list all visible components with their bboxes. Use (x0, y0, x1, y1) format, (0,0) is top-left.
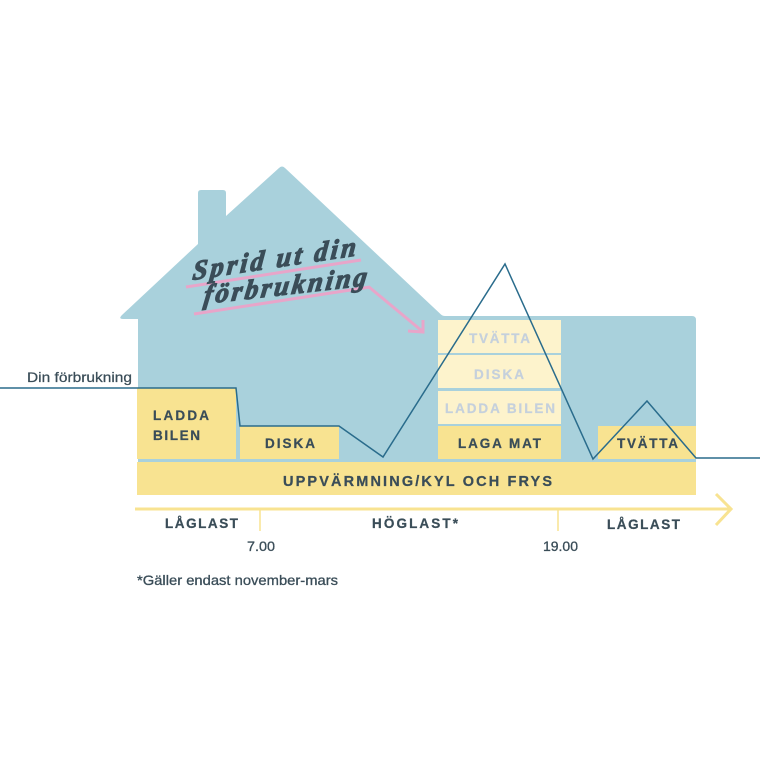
label: höglast: HÖGLAST* (372, 516, 459, 531)
block: uppvärmning/kyl och frys: UPPVÄRMNING/KYL OCH FRYS (283, 473, 552, 490)
block: laga mat: LAGA MAT (458, 436, 542, 451)
block: tvätta (moved, faded): TVÄTTA (469, 331, 530, 346)
pink underlines (186, 260, 370, 314)
block: ladda bilen (moved, faded): LADDA BILEN (445, 401, 555, 416)
block: diska (240, 426, 339, 459)
time axis arrow (135, 494, 731, 531)
script text line 2: förbrukning (202, 261, 369, 310)
house silhouette (120, 166, 696, 462)
block: tvätta: TVÄTTA (617, 436, 678, 451)
block: diska (moved, faded) (438, 355, 561, 388)
arrow: pink arrow pointing to the peak stack (369, 287, 423, 332)
label: låglast morning: LÅGLAST (165, 516, 239, 531)
block: tvätta (598, 426, 696, 459)
block: ladda bilen (moved, faded) (438, 391, 561, 424)
footnote: *Gäller endast november-mars (137, 572, 338, 588)
block: diska: DISKA (265, 436, 315, 451)
block: tvätta (moved, faded) (438, 320, 561, 353)
block: diska (moved, faded): DISKA (474, 367, 524, 382)
script text line 1: Sprid ut din (191, 231, 358, 286)
heading: sprid ut din förbrukning (186, 231, 370, 314)
block: uppvärmning/kyl och frys (137, 462, 696, 495)
label: 19.00: 19.00 (543, 538, 578, 554)
block: ladda bilen (137, 388, 236, 459)
label: 7.00: 7.00 (247, 538, 275, 554)
label: låglast evening: LÅGLAST (607, 517, 681, 532)
block: ladda bilen: BILEN (153, 428, 200, 443)
consumption line (0, 264, 760, 459)
label: din förbrukning: Din förbrukning (27, 369, 132, 385)
block: laga mat (438, 426, 561, 459)
block: ladda bilen: LADDA (153, 408, 209, 423)
